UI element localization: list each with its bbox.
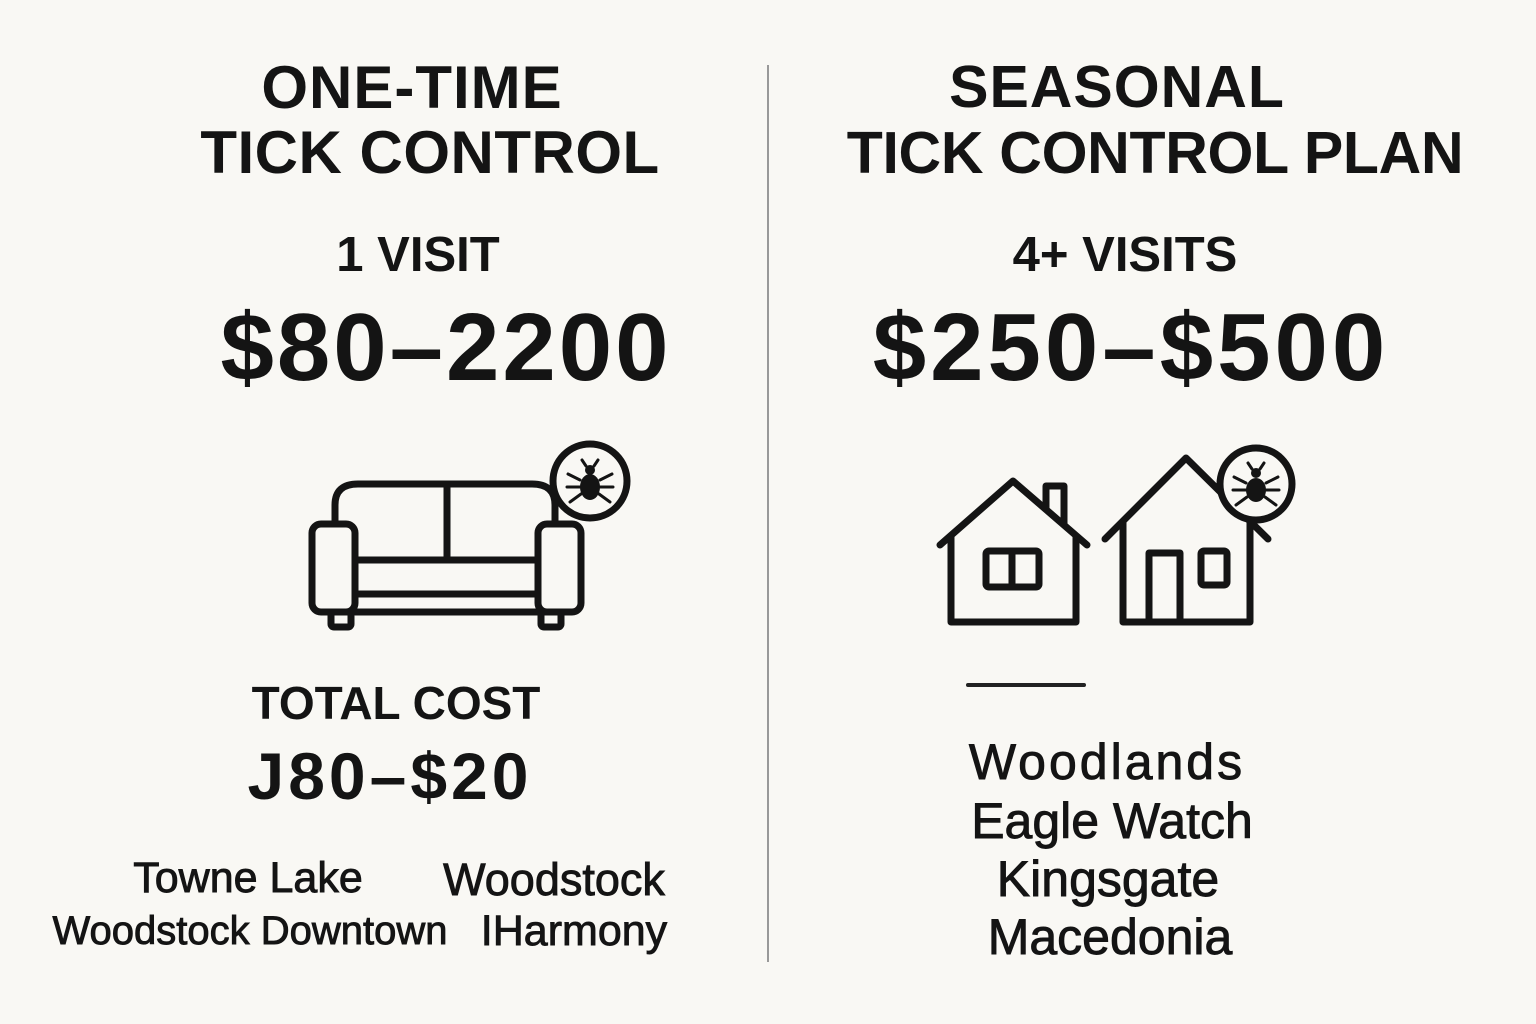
neighborhoods right: Kingsgate — [997, 851, 1219, 907]
dash mark — [966, 683, 1086, 687]
neighborhoods left: Woodstock Downtown — [52, 909, 448, 953]
neighborhoods left: Woodstock — [443, 854, 665, 905]
title: one-time: ONE-TIME — [261, 54, 563, 121]
neighborhoods left: IHarmony — [481, 907, 667, 955]
visits left: 1 VISIT — [336, 228, 500, 282]
total cost value: J80–$20 — [248, 739, 532, 813]
neighborhoods left — [52, 854, 668, 955]
price right: $250–$500 — [873, 294, 1389, 401]
neighborhoods right: Macedonia — [988, 909, 1232, 965]
visits right: 4+ VISITS — [1013, 228, 1237, 282]
neighborhoods right: Eagle Watch — [971, 793, 1253, 849]
title: seasonal — [847, 54, 1463, 186]
title: seasonal: TICK CONTROL PLAN — [847, 120, 1463, 186]
neighborhoods right: Woodlands — [969, 734, 1245, 790]
neighborhoods right — [968, 734, 1253, 965]
neighborhoods left: Towne Lake — [133, 854, 363, 902]
divider — [767, 65, 769, 962]
title: seasonal: SEASONAL — [949, 54, 1285, 120]
title: one-time: TICK CONTROL — [200, 119, 660, 186]
total cost label: TOTAL COST — [252, 677, 540, 729]
title: one-time — [200, 54, 660, 186]
price left: $80–2200 — [220, 294, 672, 401]
